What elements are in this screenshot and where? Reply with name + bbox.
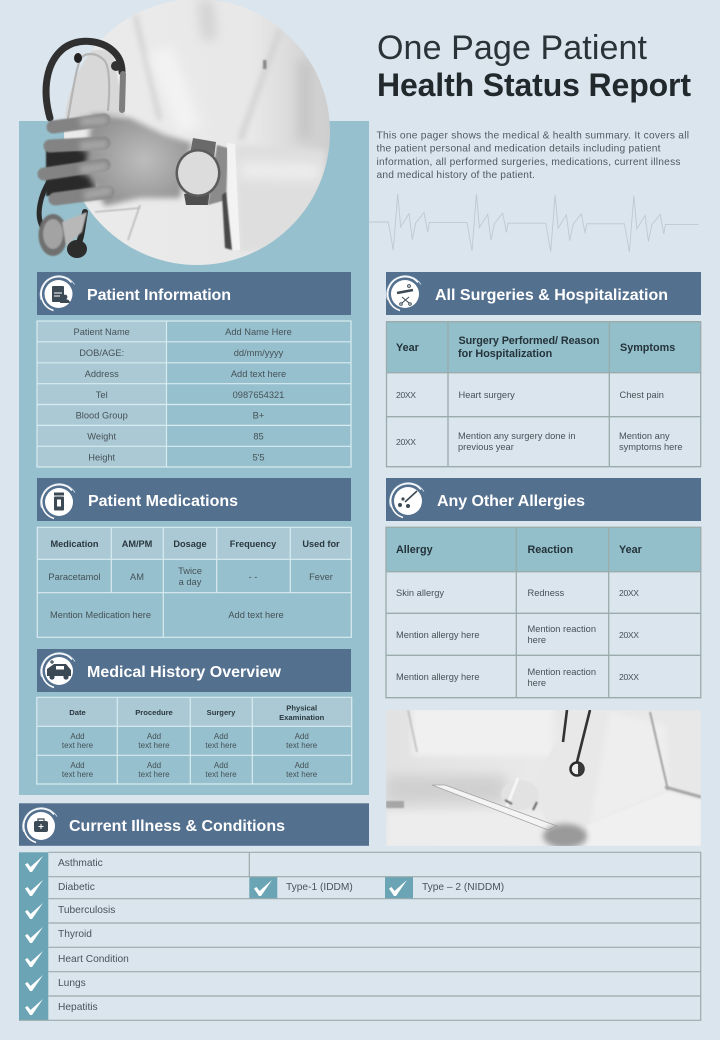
- table: surgeries: 20XX: [396, 437, 416, 447]
- table: patient medications: a day: [179, 577, 202, 587]
- panel: current conditions checklist: [19, 852, 701, 1020]
- icon: medical case: [34, 819, 48, 832]
- table: allergies: [386, 527, 701, 698]
- table: medical history: Procedure: [135, 708, 173, 717]
- description text: and medical history of the patient.: [376, 170, 535, 181]
- table: patient medications: Fever: [309, 572, 333, 582]
- title: Health Status Report: [377, 67, 691, 103]
- description text: information, all performed surgeries, medications, current illness: [376, 157, 680, 168]
- table: surgeries: previous year: [458, 442, 514, 452]
- table: allergies: Reaction: [528, 544, 573, 556]
- panel: current conditions checklist: Hepatitis: [58, 1002, 98, 1013]
- heading: Patient Information: Patient Information: [87, 287, 231, 304]
- table: surgeries: Mention any: [619, 431, 670, 441]
- table: medical history: Add: [70, 761, 85, 770]
- table: patient information: Blood Group: [76, 410, 128, 420]
- table: allergies: Mention allergy here: [396, 672, 480, 682]
- table: surgeries: Mention any surgery done in: [458, 431, 576, 441]
- table: patient medications: Mention Medication here: [50, 610, 151, 620]
- table: medical history: text here: [62, 741, 94, 750]
- panel: current conditions checklist: Tuberculosis: [58, 905, 115, 916]
- table: patient medications: Medication: [51, 539, 99, 549]
- description text: [376, 130, 689, 181]
- table: patient medications: - -: [249, 572, 257, 582]
- panel: current conditions checklist: Heart Condition: [58, 954, 129, 965]
- heading: Patient Information: [37, 272, 351, 315]
- table: surgeries: Symptoms: [620, 342, 675, 354]
- table: surgeries: Year: [396, 342, 420, 354]
- icons: check marks: [25, 856, 407, 1015]
- table: medical history: Add: [295, 732, 309, 741]
- panel: current conditions checklist: Lungs: [58, 978, 86, 989]
- table: patient medications: Dosage: [173, 539, 207, 549]
- table: patient information: Patient Name: [74, 327, 130, 337]
- table: medical history: text here: [286, 741, 318, 750]
- table: allergies: Skin allergy: [396, 588, 444, 598]
- panel: current conditions checklist: Type – 2 (NIDDM): [422, 882, 504, 893]
- table: allergies: Allergy: [396, 544, 433, 556]
- table: surgeries: Chest pain: [620, 390, 664, 400]
- table: medical history: Examination: [279, 713, 325, 722]
- table: patient information: [37, 321, 351, 467]
- table: medical history: Surgery: [207, 708, 236, 717]
- table: allergies: Mention reaction: [528, 624, 596, 634]
- table: surgeries: Heart surgery: [458, 390, 515, 400]
- table: allergies: Year: [619, 544, 643, 556]
- table: patient medications: AM: [130, 572, 144, 582]
- table: patient information: Tel: [96, 390, 108, 400]
- heading: Medical History Overview: [37, 649, 351, 692]
- heading: Medical History Overview: Medical History Overview: [87, 664, 282, 681]
- heading: Current Illness & Conditions: Current Illness & Conditions: [69, 818, 285, 835]
- heading: All Surgeries & Hospitalization: [386, 272, 701, 315]
- table: patient medications: Twice: [178, 566, 202, 576]
- heading: Any Other Allergies: Any Other Allergies: [437, 493, 585, 510]
- panel: current conditions checklist: Type-1 (IDDM): [286, 882, 353, 893]
- table: medical history: Physical: [286, 704, 317, 713]
- table: medical history: [37, 697, 352, 784]
- title: One Page Patient: [377, 29, 648, 67]
- title: [377, 29, 691, 103]
- hand: [44, 114, 192, 206]
- table: allergies: here: [528, 678, 546, 688]
- wristwatch: [176, 138, 228, 205]
- table: surgeries: 20XX: [396, 390, 416, 400]
- table: patient information: Height: [88, 452, 116, 462]
- table: medical history: text here: [138, 741, 170, 750]
- table: patient medications: Used for: [302, 539, 340, 549]
- table: medical history: text here: [62, 770, 94, 779]
- panel: current conditions checklist: Thyroid: [58, 929, 92, 940]
- table: medical history: text here: [286, 770, 318, 779]
- table: surgeries: [386, 322, 701, 467]
- icon: syringe and pills: [398, 491, 417, 508]
- icon: patient record: [52, 286, 70, 303]
- table: allergies: Mention reaction: [528, 667, 596, 677]
- icon: stretcher: [397, 285, 413, 305]
- stethoscope chest piece: [38, 212, 87, 258]
- table: patient information: Address: [85, 369, 119, 379]
- heartbeat line: [369, 194, 698, 252]
- heading: Any Other Allergies: [386, 478, 701, 521]
- stethoscope tubing: [39, 41, 123, 248]
- left teal panel: [19, 121, 369, 795]
- table: medical history: text here: [205, 741, 237, 750]
- table: allergies: Redness: [528, 588, 565, 598]
- table: medical history: Add: [214, 761, 228, 770]
- photo: doctor holding stethoscope: [38, 0, 335, 270]
- table: surgeries: symptoms here: [619, 442, 683, 452]
- panel: current conditions checklist: Asthmatic: [58, 858, 103, 869]
- table: patient information: 0987654321: [233, 390, 284, 400]
- table: medical history: Add: [70, 732, 85, 741]
- table: medical history: Add: [147, 761, 161, 770]
- table: patient medications: Paracetamol: [48, 572, 101, 582]
- table: patient information: 85: [253, 432, 264, 442]
- table: patient information: B+: [253, 410, 264, 420]
- table: medical history: Add: [214, 732, 228, 741]
- table: allergies: 20XX: [619, 588, 639, 598]
- table: surgeries: for Hospitalization: [458, 348, 552, 360]
- table: medical history: Add: [147, 732, 161, 741]
- table: allergies: 20XX: [619, 630, 639, 640]
- table: allergies: Mention allergy here: [396, 630, 480, 640]
- table: patient medications: AM/PM: [122, 539, 153, 549]
- table: medical history: Date: [69, 708, 86, 717]
- description text: This one pager shows the medical & health summary. It covers all: [376, 130, 689, 142]
- table: patient information: Add Name Here: [225, 327, 292, 337]
- table: allergies: here: [528, 635, 546, 645]
- icon: pill bottle: [54, 492, 64, 510]
- table: patient medications: Add text here: [228, 610, 284, 620]
- heading: Patient Medications: [37, 478, 351, 521]
- table: patient medications: Frequency: [230, 539, 277, 549]
- table: patient medications: [37, 527, 351, 638]
- description text: the patient personal and medication details including patient: [376, 144, 661, 154]
- table: surgeries: Surgery Performed/ Reason: [458, 335, 600, 347]
- photo: doctor writing on clipboard: [386, 708, 701, 848]
- table: allergies: 20XX: [619, 672, 639, 682]
- table: patient information: 5'5: [252, 452, 265, 462]
- table: medical history: text here: [205, 770, 237, 779]
- heading: Patient Medications: Patient Medications: [88, 493, 238, 510]
- heading: All Surgeries & Hospitalization: All Surgeries & Hospitalization: [435, 287, 668, 304]
- table: patient information: DOB/AGE:: [79, 348, 124, 358]
- table: patient information: Add text here: [231, 369, 286, 379]
- table: medical history: Add: [295, 761, 309, 770]
- icon: ambulance: [47, 660, 71, 680]
- table: patient information: Weight: [87, 432, 116, 442]
- table: medical history: text here: [138, 770, 170, 779]
- table: patient information: dd/mm/yyyy: [234, 348, 284, 358]
- coat cuff: [227, 143, 240, 250]
- panel: current conditions checklist: Diabetic: [58, 882, 95, 893]
- heading: Current Illness & Conditions: [19, 803, 369, 846]
